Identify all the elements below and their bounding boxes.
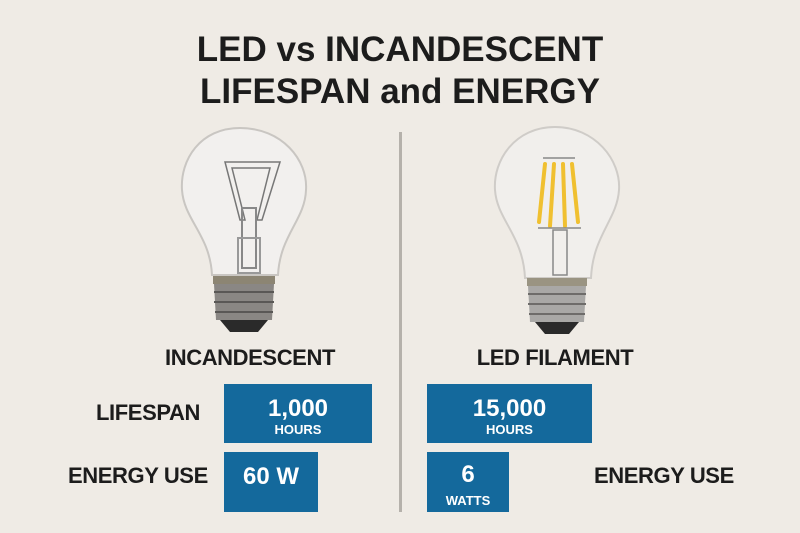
label: energy use right: ENERGY USE <box>594 463 734 488</box>
title: LIFESPAN and ENERGY <box>200 72 600 111</box>
box: 6 watts <box>427 452 509 512</box>
heading: LED filament: LED FILAMENT <box>477 345 633 370</box>
box: 6 watts: 6 <box>461 461 475 488</box>
box: 60 W <box>224 452 318 512</box>
label: lifespan: LIFESPAN <box>96 400 200 425</box>
icon: LED filament bulb <box>494 126 620 334</box>
title: LED vs INCANDESCENT <box>197 30 603 69</box>
box: 60 W: 60 W <box>243 463 299 490</box>
box: 15,000 hours: 15,000 <box>473 395 546 422</box>
box: 1,000 hours: HOURS <box>275 422 321 437</box>
box: 15,000 hours <box>427 384 592 443</box>
box: 15,000 hours: HOURS <box>486 422 533 437</box>
icon: incandescent bulb <box>180 127 307 332</box>
box: 6 watts: WATTS <box>446 493 490 508</box>
heading: incandescent: INCANDESCENT <box>165 345 335 370</box>
title <box>197 30 603 111</box>
label: energy use left: ENERGY USE <box>68 463 208 488</box>
divider <box>399 132 402 512</box>
box: 1,000 hours <box>224 384 372 443</box>
box: 1,000 hours: 1,000 <box>268 395 328 422</box>
